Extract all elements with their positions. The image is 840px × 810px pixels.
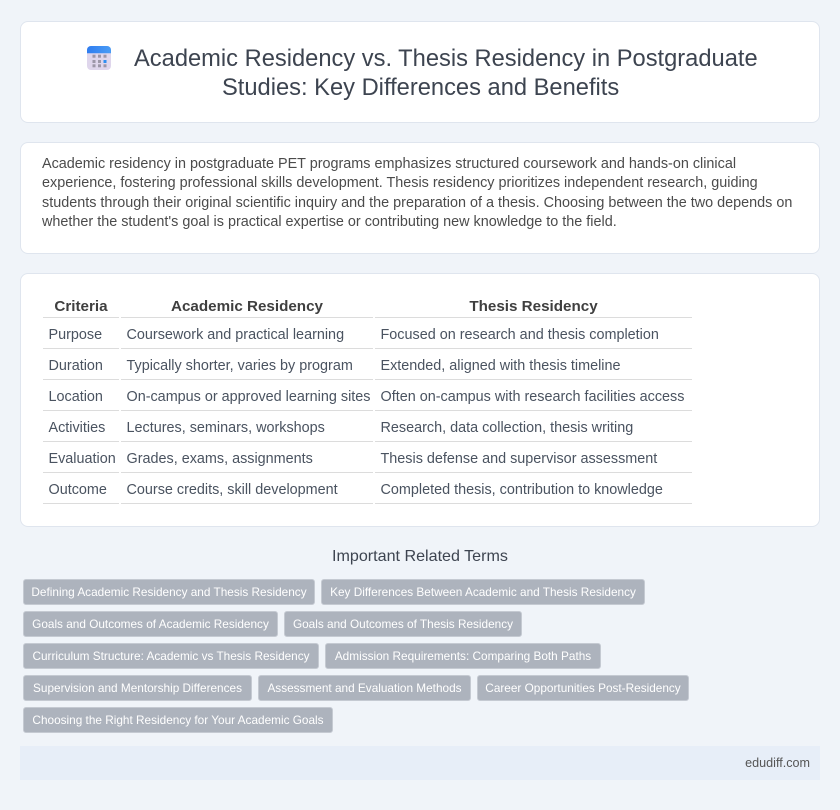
tag [23, 579, 315, 605]
tag: Admission Requirements: Comparing Both Paths [335, 649, 591, 663]
comparison table panel [20, 273, 820, 527]
tag [23, 675, 252, 701]
row: purpose: Coursework and practical learning [126, 327, 344, 343]
row: location: Often on-campus with research facilities access [380, 389, 684, 405]
row: outcome: Outcome [48, 482, 107, 498]
title [134, 46, 758, 101]
row: activities: Activities [48, 420, 105, 436]
row: evaluation: Grades, exams, assignments [126, 451, 313, 467]
related terms heading: Important Related Terms [332, 547, 508, 565]
intro paragraph: experience, fostering professional skills development. Thesis residency prioritizes independent research, guiding [42, 175, 758, 191]
table header: Thesis Residency [469, 298, 598, 315]
row: outcome [48, 482, 663, 498]
table header: Criteria [54, 298, 108, 315]
footer bar [20, 746, 820, 780]
row: location [48, 389, 684, 405]
row: outcome: Completed thesis, contribution to knowledge [380, 482, 663, 498]
row: purpose: Focused on research and thesis completion [380, 327, 659, 343]
tag: Goals and Outcomes of Thesis Residency [293, 617, 513, 631]
tag: Key Differences Between Academic and Thesis Residency [330, 585, 636, 599]
row: activities: Research, data collection, thesis writing [380, 420, 633, 436]
comparison table [43, 298, 692, 504]
tag: Choosing the Right Residency for Your Academic Goals [32, 713, 324, 727]
intro paragraph: Academic residency in postgraduate PET programs emphasizes structured coursework and hands-on clinical [42, 156, 736, 172]
row: purpose [48, 327, 659, 343]
tag [258, 675, 471, 701]
footer site name: edudiff.com [745, 756, 810, 770]
intro paragraph: whether the student's goal is practical expertise or contributing new knowledge to the field. [42, 214, 617, 230]
row: location: Location [48, 389, 103, 405]
row: activities [48, 420, 633, 436]
intro paragraph [42, 156, 792, 230]
icon: calendar [87, 46, 111, 70]
tag: Career Opportunities Post-Residency [485, 681, 681, 695]
row: evaluation: Evaluation [48, 451, 116, 467]
table header: Academic Residency [171, 298, 323, 315]
row: evaluation [48, 451, 658, 467]
tag [325, 643, 601, 669]
title: Studies: Key Differences and Benefits [222, 75, 619, 101]
row: activities: Lectures, seminars, workshops [126, 420, 325, 436]
tag [284, 611, 522, 637]
tag [321, 579, 645, 605]
tag: Defining Academic Residency and Thesis Residency [31, 585, 307, 599]
row: duration: Extended, aligned with thesis timeline [380, 358, 620, 374]
title: Academic Residency vs. Thesis Residency in Postgraduate [134, 46, 758, 72]
intro text panel [20, 142, 820, 254]
tag [23, 611, 278, 637]
row: duration [48, 358, 620, 374]
row: duration: Duration [48, 358, 103, 374]
row: duration: Typically shorter, varies by program [126, 358, 353, 374]
table header [54, 298, 598, 315]
row: purpose: Purpose [48, 327, 102, 343]
row: evaluation: Thesis defense and supervisor assessment [380, 451, 657, 467]
tag: Assessment and Evaluation Methods [267, 681, 462, 695]
intro paragraph: students through their original scientific inquiry and the preparation of a thesis. Choosing between the two depends on [42, 195, 792, 211]
tag [477, 675, 689, 701]
row: outcome: Course credits, skill development [126, 482, 338, 498]
tag: Goals and Outcomes of Academic Residency [32, 617, 269, 631]
tag [23, 643, 319, 669]
tag [23, 707, 333, 733]
header panel [20, 21, 820, 123]
related terms tags [23, 579, 689, 733]
tag: Curriculum Structure: Academic vs Thesis Residency [32, 649, 310, 663]
tag: Supervision and Mentorship Differences [33, 681, 242, 695]
row: location: On-campus or approved learning sites [126, 389, 370, 405]
